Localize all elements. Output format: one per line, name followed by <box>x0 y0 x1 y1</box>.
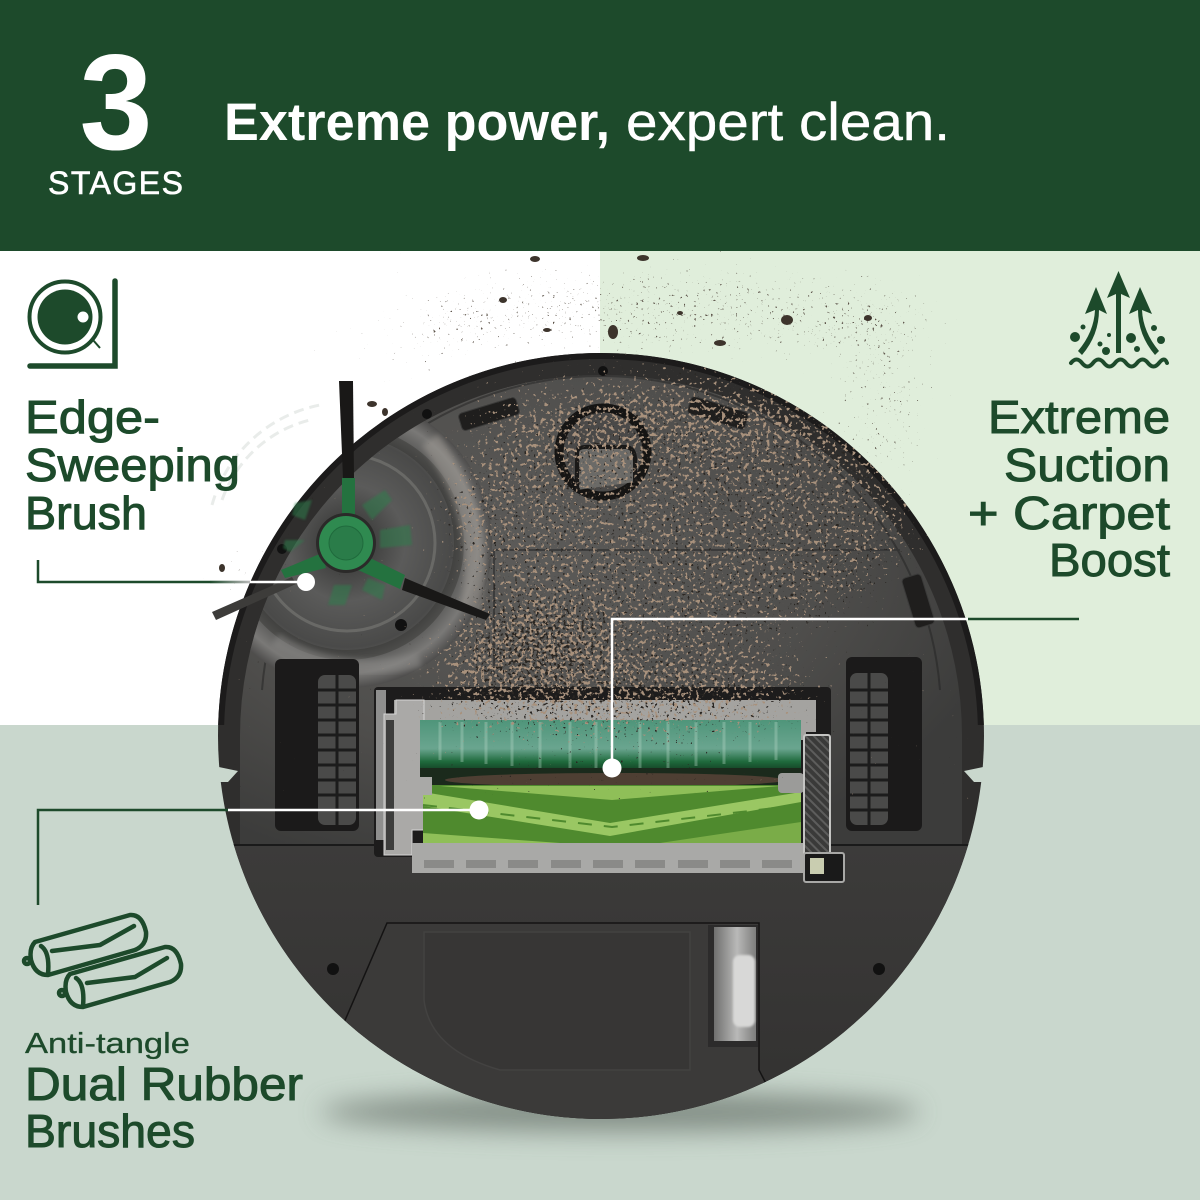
caster wheel <box>559 408 647 496</box>
screw holes <box>277 366 885 975</box>
label: edge sweeping brush <box>25 391 240 539</box>
side latches <box>420 777 432 795</box>
brush dish swirl <box>250 422 492 684</box>
label: extreme suction: Suction <box>1004 439 1170 491</box>
bristle left <box>212 577 296 620</box>
plate groove <box>262 376 940 690</box>
title second part: expert clean. <box>626 93 950 152</box>
lower body <box>218 845 988 1125</box>
label: extreme suction: + Carpet <box>968 487 1170 539</box>
icon: suction arrows <box>1070 271 1167 366</box>
dust bin <box>344 922 766 1119</box>
connector box <box>804 853 844 882</box>
label: extreme suction: Extreme <box>988 391 1170 443</box>
hub <box>316 513 376 573</box>
label: extreme suction <box>968 391 1170 586</box>
title: Extreme power, <box>224 93 610 152</box>
sage background panel <box>0 725 1200 1200</box>
bin tab highlight <box>733 955 755 1027</box>
side notches <box>214 766 988 782</box>
stage count <box>48 26 183 201</box>
stage count: 3 <box>80 26 152 178</box>
airborne debris spray <box>214 265 950 600</box>
robot vacuum underside <box>202 353 988 1125</box>
label: anti-tangle dual rubber brushes <box>25 1028 303 1157</box>
debris on plate <box>410 370 920 783</box>
large debris flecks <box>219 255 872 572</box>
debris band <box>420 768 801 786</box>
label: edge sweeping brush: Edge- <box>25 391 160 443</box>
robot body <box>218 353 984 1119</box>
lower green rubber brush <box>423 785 801 843</box>
stage count: STAGES <box>48 165 183 201</box>
plate seam <box>494 550 900 675</box>
upper plate <box>240 375 962 845</box>
label: anti-tangle dual rubber brushes: Brushes <box>25 1105 195 1157</box>
hatch door <box>804 735 830 855</box>
light green background panel <box>600 251 1200 725</box>
left wheel <box>275 659 359 831</box>
swirl marks on white <box>212 405 320 505</box>
white background panel <box>0 251 600 725</box>
header band <box>0 0 1200 251</box>
airflow streaks <box>440 722 776 768</box>
brush compartment <box>374 687 844 882</box>
floor shadow <box>320 1092 920 1132</box>
side brush <box>212 381 490 620</box>
icon: edge sweeping <box>30 281 115 366</box>
label: edge sweeping brush: Sweeping <box>25 439 240 491</box>
green motion blur spokes <box>283 490 412 605</box>
leader line: suction <box>602 619 1079 778</box>
green arms <box>281 478 405 589</box>
bristle top <box>339 381 354 478</box>
bumper edge <box>218 353 984 725</box>
label: extreme suction: Boost <box>1049 534 1170 586</box>
leader line: edge brush <box>38 560 315 591</box>
right wheel <box>846 657 922 831</box>
label: edge sweeping brush: Brush <box>25 487 147 539</box>
icon: dual rubber rollers <box>24 915 181 1007</box>
airflow green channel <box>420 720 801 772</box>
label: anti-tangle dual rubber brushes: Anti-tangle <box>25 1028 190 1060</box>
front gray bar <box>412 843 805 873</box>
top sensor slots <box>458 396 935 629</box>
bin filter tab <box>708 925 758 1047</box>
label: anti-tangle dual rubber brushes: Dual Rubber <box>25 1058 303 1110</box>
leader line: rubber brushes <box>38 800 488 905</box>
bristle right <box>402 578 490 620</box>
